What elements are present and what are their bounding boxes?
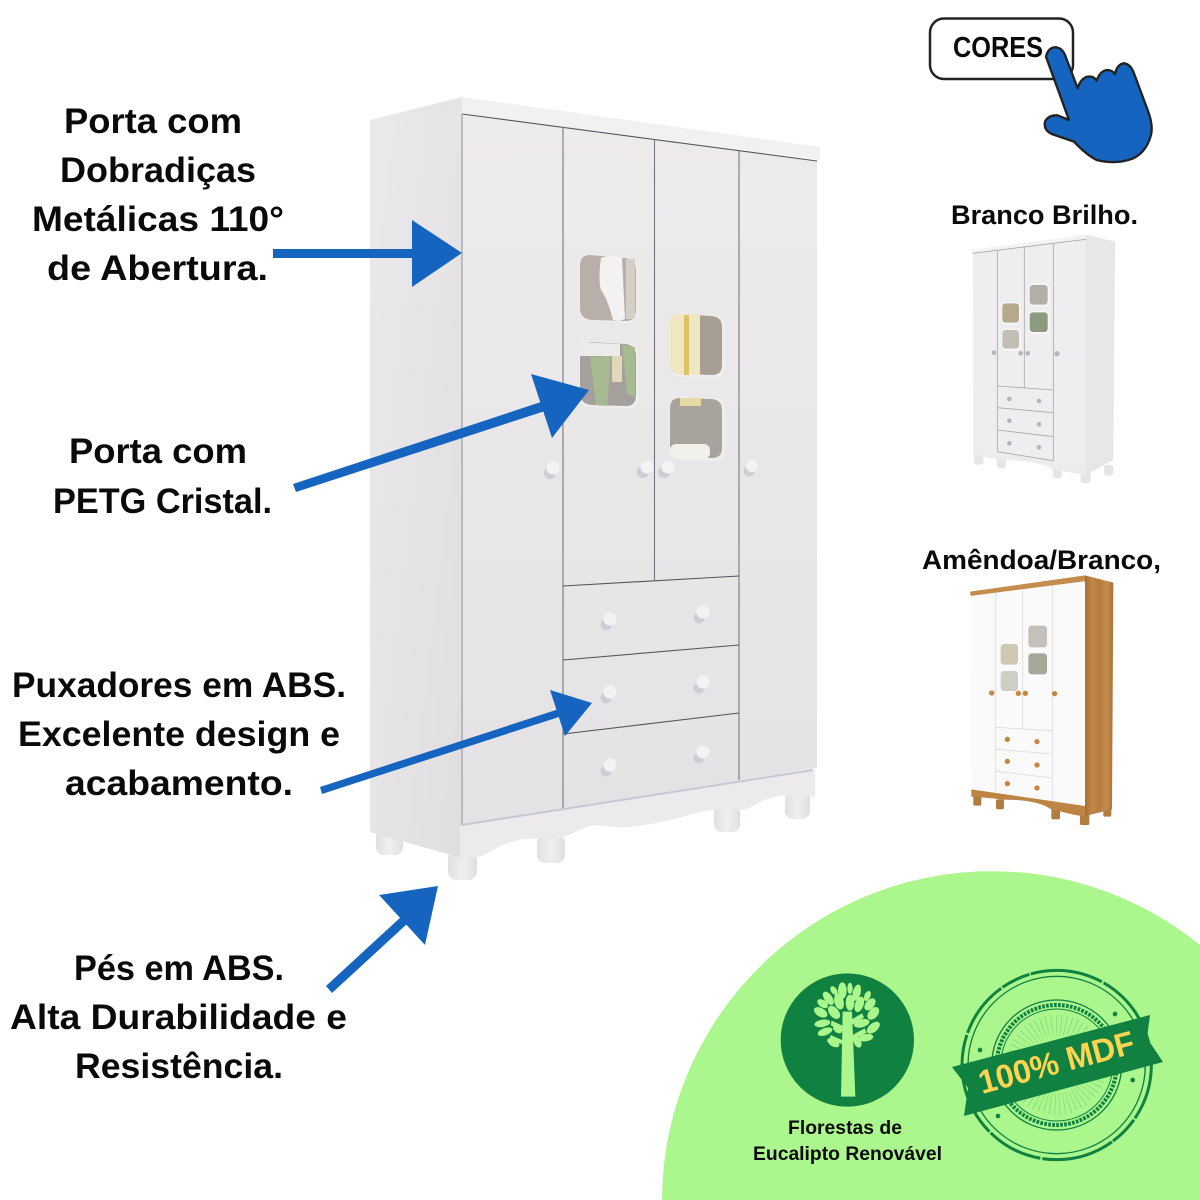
- arrow: feet: [326, 886, 438, 993]
- base with scalloped edge: [460, 770, 815, 858]
- icon: pointing hand: [1045, 47, 1152, 162]
- main wardrobe: [370, 97, 820, 880]
- heading: handles: [12, 666, 346, 803]
- heading: feet: [10, 949, 347, 1086]
- heading: hinges: de Abertura.: [47, 249, 268, 288]
- window: lower right: [669, 397, 725, 461]
- mini wardrobe: white: [972, 235, 1115, 483]
- knobs: [544, 460, 758, 776]
- heading: handles: acabamento.: [65, 764, 293, 803]
- heading: PETG door: [53, 432, 272, 521]
- caption: eucalyptus: [753, 1118, 942, 1165]
- heading: PETG door: Porta com: [69, 432, 247, 471]
- door and drawer lines: [462, 114, 817, 825]
- green corner circle: [662, 871, 1200, 1200]
- heading: hinges: Metálicas 110°: [32, 200, 284, 239]
- arrow: PETG door: [293, 374, 589, 492]
- icon: tree: [812, 982, 882, 1097]
- button: cores: [930, 18, 1073, 79]
- stamp: 100% MDF: [952, 970, 1163, 1160]
- heading: feet: Pés em ABS.: [74, 949, 284, 988]
- window: upper left: [579, 254, 639, 323]
- mini wardrobe: almond and white: [970, 575, 1113, 825]
- caption: eucalyptus: Florestas de: [788, 1118, 902, 1139]
- front face: [462, 114, 817, 825]
- label: branco brilho: Branco Brilho.: [951, 200, 1138, 230]
- banner text: 100% MDF: [974, 1024, 1138, 1101]
- arrow: hinges: [273, 220, 462, 287]
- heading: hinges: Porta com: [64, 102, 242, 141]
- side panel: [370, 97, 462, 858]
- heading: PETG door: PETG Cristal.: [53, 482, 272, 521]
- window: lower left with green cloth: [579, 341, 639, 409]
- label: amendoa branco: Amêndoa/Branco,: [922, 545, 1161, 575]
- banner: [952, 1015, 1163, 1116]
- badge: eucalyptus tree: [781, 973, 914, 1107]
- heading: handles: Excelente design e: [18, 715, 340, 754]
- window: upper right with curtain: [669, 313, 725, 378]
- heading: feet: Resistência.: [75, 1047, 283, 1086]
- heading: hinges: [32, 102, 284, 288]
- feet: [376, 791, 810, 880]
- heading: feet: Alta Durabilidade e: [10, 998, 347, 1037]
- top cap: [462, 97, 820, 160]
- arrow: handles: [320, 690, 592, 794]
- button: cores: CORES: [953, 32, 1043, 64]
- heading: handles: Puxadores em ABS.: [12, 666, 346, 705]
- heading: hinges: Dobradiças: [60, 151, 256, 190]
- caption: eucalyptus: Eucalipto Renovável: [753, 1144, 942, 1165]
